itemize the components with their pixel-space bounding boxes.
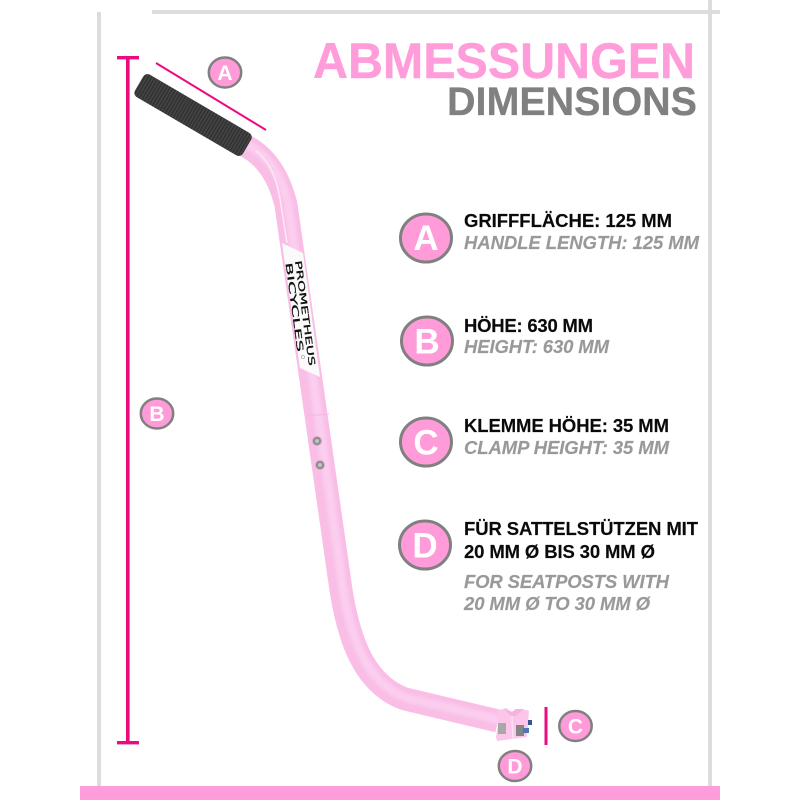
spec B text: HEIGHT: 630 MM [464, 336, 610, 357]
spec C text: KLEMME HÖHE: 35 MM [464, 415, 669, 436]
badge C small: C [568, 716, 583, 738]
spec D text: 20 MM Ø TO 30 MM Ø [463, 593, 651, 614]
spec C: clamp height [400, 415, 670, 466]
dimension B: height marker [117, 56, 139, 744]
spec D text: 20 MM Ø BIS 30 MM Ø [464, 541, 655, 562]
badge D [400, 521, 450, 569]
spec B: height [402, 315, 610, 365]
product: pink support handle [133, 72, 532, 741]
badge A small: A [217, 62, 233, 85]
badge D: D [412, 526, 438, 566]
badge D small [499, 751, 531, 781]
spec A text [464, 210, 700, 253]
badge B [402, 317, 452, 365]
spec C text [464, 415, 670, 458]
brand label: PROMETHEUS [292, 260, 316, 367]
badge A small [209, 58, 241, 88]
title: Abmessungen: ABMESSUNGEN [313, 32, 695, 89]
clamp [496, 708, 532, 741]
dimension C: clamp height marker [544, 707, 548, 745]
spec C text: CLAMP HEIGHT: 35 MM [464, 437, 670, 458]
spec D text: FÜR SATTELSTÜTZEN MIT [464, 518, 699, 539]
spec A text: GRIFFFLÄCHE: 125 MM [464, 210, 672, 231]
spec D text [463, 518, 699, 614]
bottom pink bar [80, 786, 720, 800]
spec D text: FOR SEATPOSTS WITH [464, 571, 670, 592]
badge C [400, 418, 452, 466]
tube [244, 144, 500, 721]
badge C small [559, 711, 592, 741]
black grip [133, 72, 254, 158]
bolts [312, 436, 324, 470]
spec B text [464, 315, 610, 357]
badge A: A [413, 219, 439, 258]
badge B small [141, 398, 173, 428]
badge D small: D [507, 756, 523, 778]
badge C: C [413, 424, 439, 462]
badge B small: B [149, 403, 165, 426]
spec A text: HANDLE LENGTH: 125 MM [464, 232, 700, 253]
subtitle: Dimensions: DIMENSIONS [447, 80, 697, 124]
badge A [400, 214, 452, 262]
spec B text: HÖHE: 630 MM [464, 315, 593, 336]
dimension A: grip length marker [156, 63, 266, 130]
spec A: handle length [400, 210, 700, 262]
brand label [282, 243, 320, 377]
brand label: BICYCLES [283, 262, 304, 353]
spec D: seatpost range [400, 518, 699, 614]
badge B: B [414, 322, 440, 362]
